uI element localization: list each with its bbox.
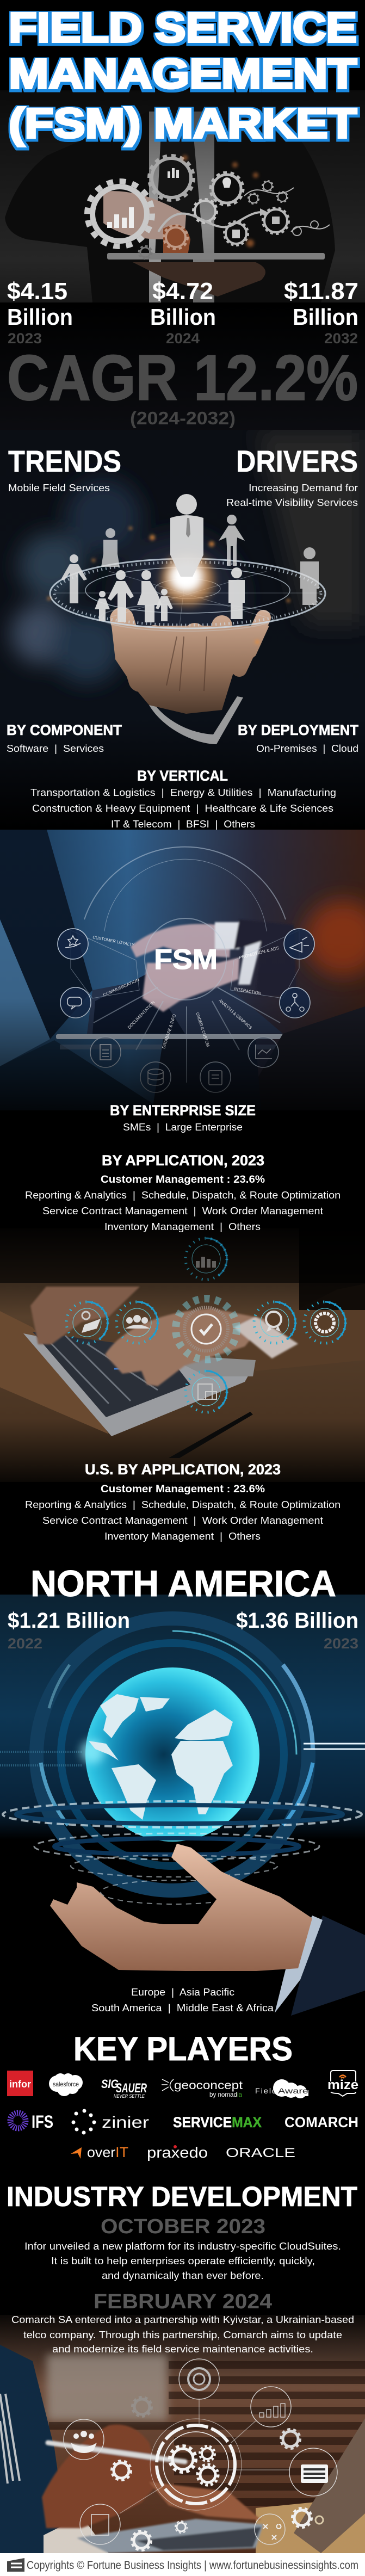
US by application: U.S. BY APPLICATION, 2023 [85,1461,281,1478]
hud labels: CUSTOMER LOYALTY [92,935,135,948]
icon: ring glyphs [82,1257,334,1399]
development: October 2023 [24,2215,341,2281]
panel: hero photo with gears [0,90,365,302]
by component [7,722,122,754]
stat: 2032 market size [284,278,358,347]
bokeh lights [182,123,258,247]
logo: geoconcept: geoconcept [174,2079,243,2092]
icon: gear inner icons [168,168,280,238]
by deployment: On-Premises | Cloud [256,743,358,754]
heading: trends: Mobile Field Services [8,482,110,493]
icon: gears cluster [139,156,318,259]
logo: fieldaware [255,2079,308,2098]
stat: 2024 market size [150,278,216,347]
development: October 2023: Infor unveiled a new platform for its industry-specific CloudSuites. [24,2240,341,2252]
icon: FSM dial arcs [71,847,299,1083]
development: February 2024: Comarch SA entered into a partnership with Kyivstar, a Ukrainian-based [11,2314,354,2325]
development: October 2023: and dynamically than ever before. [102,2270,264,2281]
logo: praxedo: praxedo [147,2144,208,2161]
stat: North America 2022: 2022 [8,1635,42,1652]
logo: zinier: zinier [102,2114,149,2132]
logo: geoconcept: by nomadia [209,2091,242,2098]
stat: 2023 market size: 2023 [8,330,42,347]
heading: north america: NORTH AMERICA [30,1563,336,1604]
heading: drivers: Real-time Visibility Services [226,497,358,508]
development: February 2024 [11,2290,354,2355]
stat: North America 2022 [8,1609,130,1652]
icon: small gears [112,2397,323,2550]
icon: shirt cuff [275,1916,323,2013]
by enterprise size: SMEs | Large Enterprise [123,1121,243,1133]
by vertical: BY VERTICAL [137,768,228,784]
icon: shirt cuff [149,696,243,744]
logo: fieldaware: Field [255,2086,277,2095]
stat: North America 2023: 2023 [324,1635,358,1652]
stat: North America 2023 [236,1609,358,1652]
stat: 2032 market size: 2032 [324,330,358,347]
stat: 2032 market size: $11.87 [284,278,358,305]
stat: 2024 market size: $4.72 [152,278,213,305]
icon: hands [131,919,296,1012]
development: February 2024: FEBRUARY 2024 [94,2290,272,2313]
by vertical: IT & Telecom | BFSI | Others [111,818,255,830]
callout: FSM: FSM [154,944,218,975]
icon: central gears [150,2419,242,2510]
panel: globe photo [0,1595,365,2024]
logo: sig sauer [101,2077,147,2099]
CAGR: (2024-2032) [130,408,236,428]
panel: business pen photo [0,2315,365,2553]
development: February 2024: and modernize its field service maintenance activities. [52,2343,313,2355]
logo: fieldaware: Aware [278,2086,308,2095]
logo: infor [7,2071,33,2096]
stat: 2024 market size: 2024 [166,330,200,347]
icon: laptop [23,1332,256,1458]
by vertical: Construction & Heavy Equipment | Healthcare & Life Sciences [32,802,333,814]
icon: large gear [87,181,152,246]
logo: servicemax: SERVICEMAX [173,2114,262,2130]
heading: trends: TRENDS [8,444,121,478]
hud labels [92,935,280,1049]
icon: growth arrows [158,188,330,232]
by application: Service Contract Management | Work Order Management [42,1205,323,1216]
icon: globe rings [0,1619,365,1891]
icon: tech rings [66,1238,345,1412]
by component: BY COMPONENT [7,722,122,738]
stat: 2032 market size: Billion [293,304,358,330]
logo: salesforce: salesforce [53,2080,79,2088]
bokeh sparks [47,527,290,644]
stat: 2023 market size: Billion [7,304,73,330]
icon: hand [112,617,269,714]
footer: copyright bar [0,2553,365,2576]
hud labels: ORDER & CUSTOM [195,1012,211,1048]
by enterprise size [110,1102,256,1133]
logo: oracle: ORACLE [226,2146,295,2160]
hud labels: INTERACTION [234,986,262,996]
hud labels: ANALYSIS & GRAPHICS [218,998,253,1030]
heading: drivers: Increasing Demand for [249,482,358,493]
title: (FSM) MARKET [9,100,357,147]
icon: globe [81,1667,259,1842]
panel: hand holding people network [0,430,365,830]
hud labels: PROMOTION & ADS [238,946,280,960]
by component: Software | Services [7,743,104,754]
development: October 2023: It is built to help enterprises operate efficiently, quickly, [51,2255,315,2266]
icon: network ring [50,559,325,631]
by application: Customer Management : 23.6% [101,1173,265,1185]
by enterprise size: BY ENTERPRISE SIZE [110,1102,256,1119]
panel: FSM laptop photo [0,830,365,1110]
logo: overIT: overIT [87,2144,128,2160]
development: October 2023: OCTOBER 2023 [101,2215,265,2238]
by vertical [30,768,336,830]
logo: IFS: IFS [32,2112,53,2132]
logo: geoconcept [162,2079,243,2098]
US by application: Service Contract Management | Work Order Management [42,1515,323,1526]
icon: feature circles [58,929,314,1092]
by deployment [238,722,358,754]
US by application: Reporting & Analytics | Schedule, Dispatch, & Route Optimization [25,1499,341,1510]
heading: trends [8,444,121,493]
stat: 2023 market size: $4.15 [7,278,67,305]
hud labels: COMMUNICATION [102,977,140,998]
icon: fortune business insights logo [7,2558,24,2572]
hud labels: DOCUMENTATION [127,1000,156,1030]
heading: drivers [226,444,358,508]
icon: bar chart [107,207,134,228]
logo: sig sauer: SIG [101,2077,119,2091]
other regions [91,1986,274,2013]
US by application: Inventory Management | Others [104,1530,261,1542]
other regions: Europe | Asia Pacific [131,1986,234,1998]
logo: zinier [72,2109,149,2135]
development: February 2024: telco company. Through this partnership, Comarch aims to update [23,2329,342,2340]
logo: mize [327,2071,358,2096]
US by application: Customer Management : 23.6% [101,1483,265,1495]
logo: IFS [10,2112,53,2132]
other regions: South America | Middle East & Africa [91,2002,274,2013]
logo: mize: mize [327,2078,358,2092]
title [9,4,357,147]
hud labels: DATABASE & INFO [161,1014,177,1049]
heading: industry development: INDUSTRY DEVELOPMENT [7,2181,357,2212]
by application: BY APPLICATION, 2023 [102,1152,264,1169]
icon: people figures [61,494,319,622]
logo: comarch: COMARCH [284,2114,358,2130]
by application [25,1152,341,1232]
title: FIELD SERVICE [9,4,357,51]
icon: suit sleeve [291,1916,365,2016]
logo: sig sauer: SAUER [116,2081,147,2096]
by vertical: Transportation & Logistics | Energy & Utilities | Manufacturing [30,787,336,798]
icon: holo discs [3,1801,362,1904]
icon: satellite glyphs [71,2368,328,2540]
title: MANAGEMENT [9,51,357,97]
logo: infor: infor [9,2079,31,2090]
by application: Reporting & Analytics | Schedule, Dispatch, & Route Optimization [25,1189,341,1201]
logo: sig sauer: NEVER SETTLE [114,2093,145,2099]
icon: hands [30,1287,298,1386]
icon: hand with globe [50,1844,312,1971]
stat: 2024 market size: Billion [150,304,216,330]
heading: key players: KEY PLAYERS [73,2030,293,2067]
icon: satellite circles [64,2359,337,2544]
glow [162,553,214,606]
by deployment: BY DEPLOYMENT [238,722,358,738]
logo: salesforce [49,2073,83,2096]
icon: hands and pen [42,2425,263,2553]
stat: 2023 market size [7,278,73,347]
icon: feature glyphs [65,936,309,1085]
stat: North America 2022: $1.21 Billion [8,1609,130,1633]
stat: North America 2023: $1.36 Billion [236,1609,358,1633]
US by application [25,1461,341,1542]
panel: typing on laptop photo [0,1228,365,1482]
by application: Inventory Management | Others [104,1221,261,1232]
